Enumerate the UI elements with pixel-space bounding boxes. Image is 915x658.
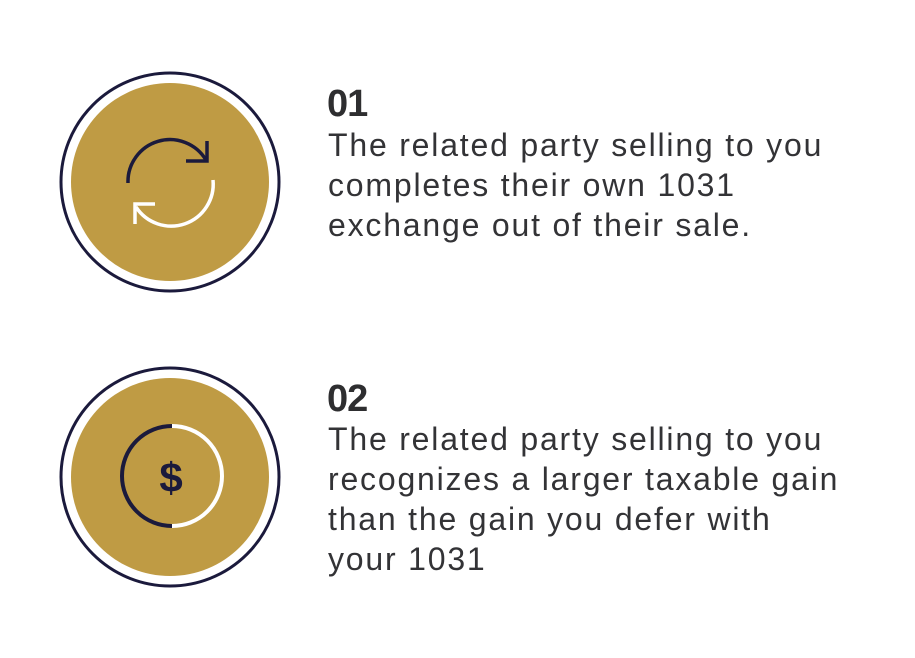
text block 02: recognizes a larger taxable gain (328, 461, 839, 497)
text block 01: completes their own 1031 (328, 167, 736, 203)
text block 02: than the gain you defer with (328, 501, 772, 537)
icon: dollar circle: $ (159, 454, 183, 501)
text block 02: The related party selling to you (328, 421, 823, 457)
text block 01 (328, 127, 823, 243)
text block 02 (328, 421, 839, 577)
icon: dollar circle (60, 366, 280, 588)
text block 01: The related party selling to you (328, 127, 823, 163)
icon: refresh circle (60, 72, 280, 292)
number 02: 02 (327, 378, 367, 420)
number 01: 01 (327, 83, 367, 125)
text block 01: exchange out of their sale. (328, 207, 752, 243)
text block 02: your 1031 (328, 541, 487, 577)
